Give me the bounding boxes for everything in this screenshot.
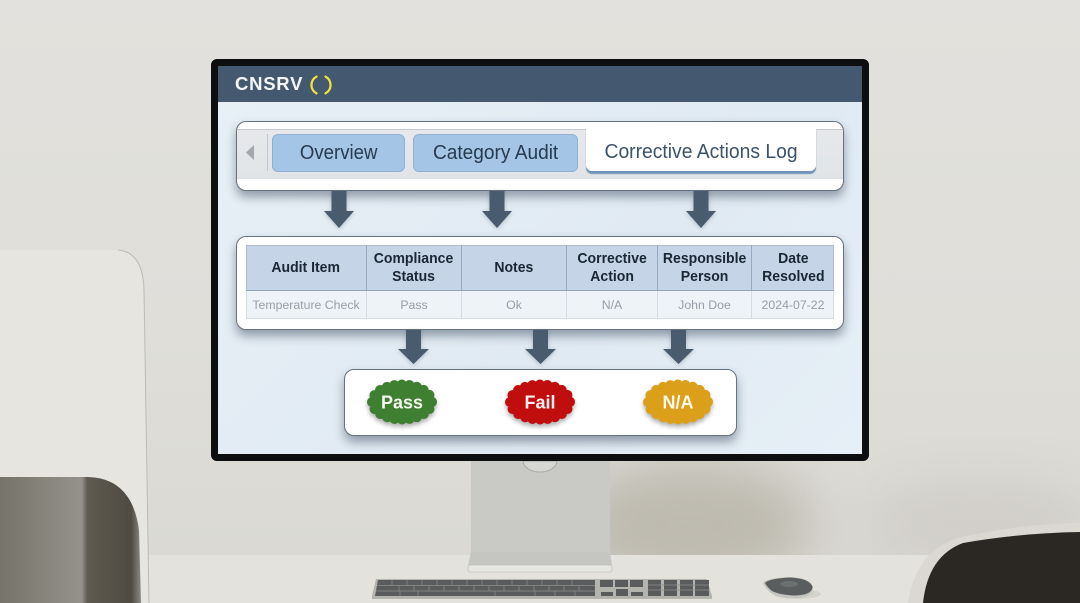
right chair <box>908 523 1080 603</box>
logo text: CNSRV <box>235 73 303 94</box>
cell: Ok: Ok <box>506 298 522 312</box>
status badges <box>365 380 715 430</box>
tab: Corrective Actions Log <box>586 128 816 171</box>
header: Date Resolved <box>762 250 824 285</box>
panel: status legend <box>344 369 737 436</box>
strip divider <box>267 134 268 171</box>
arrow: Overview to table <box>324 190 354 230</box>
screen <box>218 66 862 454</box>
badge: Pass <box>372 384 432 420</box>
table <box>246 245 834 319</box>
keyboard <box>372 579 712 599</box>
cell: N/A <box>567 291 658 319</box>
tab: Category Audit: Category Audit <box>433 142 558 164</box>
left chair <box>0 250 149 603</box>
header: Compliance Status <box>367 245 462 291</box>
tab: Category Audit <box>413 134 578 172</box>
header bar with logo <box>218 66 862 102</box>
arrow: Corrective Actions Log to table <box>686 190 716 230</box>
cell: Pass: Pass <box>400 298 428 312</box>
header: Responsible Person: Responsible <box>663 250 746 267</box>
cell: N/A: N/A <box>602 298 622 312</box>
tab: Overview: Overview <box>300 142 377 164</box>
table row background <box>246 291 834 319</box>
arrow: table to Pass <box>398 328 429 366</box>
logo mark <box>310 75 332 95</box>
cell: Temperature Check: Temperature Check <box>252 298 360 312</box>
header: Responsible Person: Person <box>681 268 728 285</box>
header: Responsible Person <box>658 245 752 291</box>
panel: audit table <box>236 236 844 330</box>
header: Corrective Action <box>567 245 658 291</box>
badge: Fail: Fail <box>524 392 556 412</box>
cell: John Doe <box>658 291 752 319</box>
cell: John Doe: John Doe <box>678 298 731 312</box>
cell: Temperature Check <box>246 291 367 319</box>
table header background <box>246 245 834 291</box>
header: Audit Item <box>246 245 367 291</box>
header: Notes <box>462 245 567 291</box>
badge: Pass: Pass <box>381 392 423 412</box>
monitor stand <box>468 461 612 572</box>
monitor <box>211 59 869 461</box>
tab: Overview <box>272 134 405 172</box>
badge: N/A <box>648 384 708 420</box>
header: Compliance Status: Status <box>393 268 435 285</box>
panel: tab navigation <box>236 121 844 191</box>
desk <box>0 555 1080 603</box>
mouse <box>763 577 821 599</box>
header: Compliance Status: Compliance <box>374 250 454 267</box>
header: Date Resolved: Resolved <box>762 268 824 285</box>
arrow: Category Audit to table <box>482 190 512 230</box>
header: Date Resolved: Date <box>778 250 808 267</box>
cell: Pass <box>367 291 462 319</box>
wall shadow <box>610 461 1066 555</box>
header: Audit Item: Audit Item <box>272 259 340 276</box>
header: Notes: Notes <box>495 259 533 276</box>
tab strip <box>237 129 843 179</box>
tab: Corrective Actions Log: Corrective Actions Log <box>604 141 798 163</box>
header: Corrective Action: Corrective <box>577 250 647 267</box>
icon: left scroll arrow <box>246 145 254 160</box>
badge: Fail <box>510 384 570 420</box>
badge: N/A: N/A <box>662 392 694 412</box>
arrow: table to Fail <box>525 328 556 366</box>
header: Corrective Action: Action <box>590 268 634 285</box>
cell: Ok <box>462 291 567 319</box>
cell: 2024-07-22: 2024-07-22 <box>762 298 824 312</box>
background scene: wall, desk and furniture <box>0 250 1080 603</box>
arrow: table to N/A <box>663 328 694 366</box>
